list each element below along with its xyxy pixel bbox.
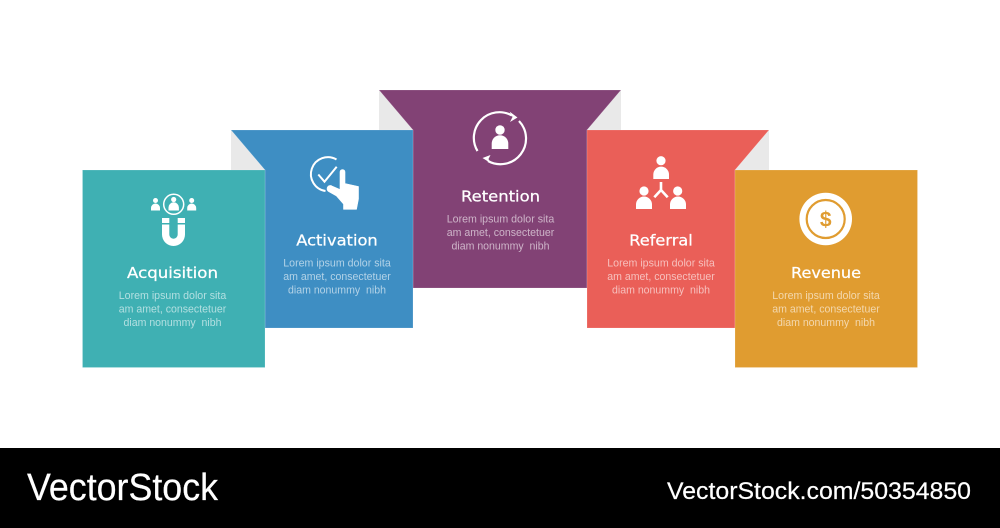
text: revenue body: am amet, consectetuer: [772, 304, 880, 316]
text: retention body: diam nonummy nibh: [452, 240, 550, 252]
text: revenue body: diam nonummy nibh: [777, 317, 875, 329]
heading: revenue: Revenue: [791, 264, 861, 282]
icon: check and pointing hand: [311, 157, 358, 209]
text: retention body: am amet, consectetuer: [447, 227, 555, 239]
text: revenue body: [772, 290, 881, 329]
text: acquisition body: Lorem ipsum dolor sita: [119, 290, 227, 302]
text: acquisition body: diam nonummy nibh: [124, 317, 222, 329]
icon: referral network: [636, 156, 686, 209]
panel: acquisition: [82, 170, 265, 368]
text: referral body: [607, 258, 716, 296]
text: activation body: Lorem ipsum dolor sita: [283, 258, 392, 270]
text: referral body: am amet, consectetuer: [607, 271, 715, 283]
panel: revenue: [735, 170, 918, 368]
text: referral body: Lorem ipsum dolor sita: [607, 258, 716, 270]
text: retention body: Lorem ipsum dolor sita: [447, 214, 555, 226]
icon: customer magnet: [151, 194, 196, 246]
icon: dollar coin: $: [820, 208, 832, 232]
text: acquisition body: [119, 290, 227, 329]
icon: retention cycle: [474, 112, 526, 164]
icon: dollar coin: [799, 193, 852, 245]
heading: acquisition: Acquisition: [127, 264, 218, 282]
heading: referral: Referral: [629, 232, 693, 250]
panel: referral: [587, 130, 769, 328]
text: activation body: am amet, consectetuer: [283, 271, 391, 283]
text: activation body: diam nonummy nibh: [288, 284, 386, 296]
watermark banner: [0, 448, 1000, 528]
heading: retention: Retention: [461, 188, 540, 206]
text: activation body: [283, 258, 392, 296]
heading: activation: Activation: [296, 232, 378, 250]
text: acquisition body: am amet, consectetuer: [119, 304, 227, 316]
text: retention body: [447, 214, 555, 252]
image id text: VectorStock.com/50354850: [667, 478, 971, 505]
text: referral body: diam nonummy nibh: [612, 284, 710, 296]
panel: retention: [379, 90, 621, 288]
logo text: VectorStock: [27, 467, 219, 509]
text: revenue body: Lorem ipsum dolor sita: [772, 290, 881, 302]
panel: activation: [231, 130, 413, 328]
